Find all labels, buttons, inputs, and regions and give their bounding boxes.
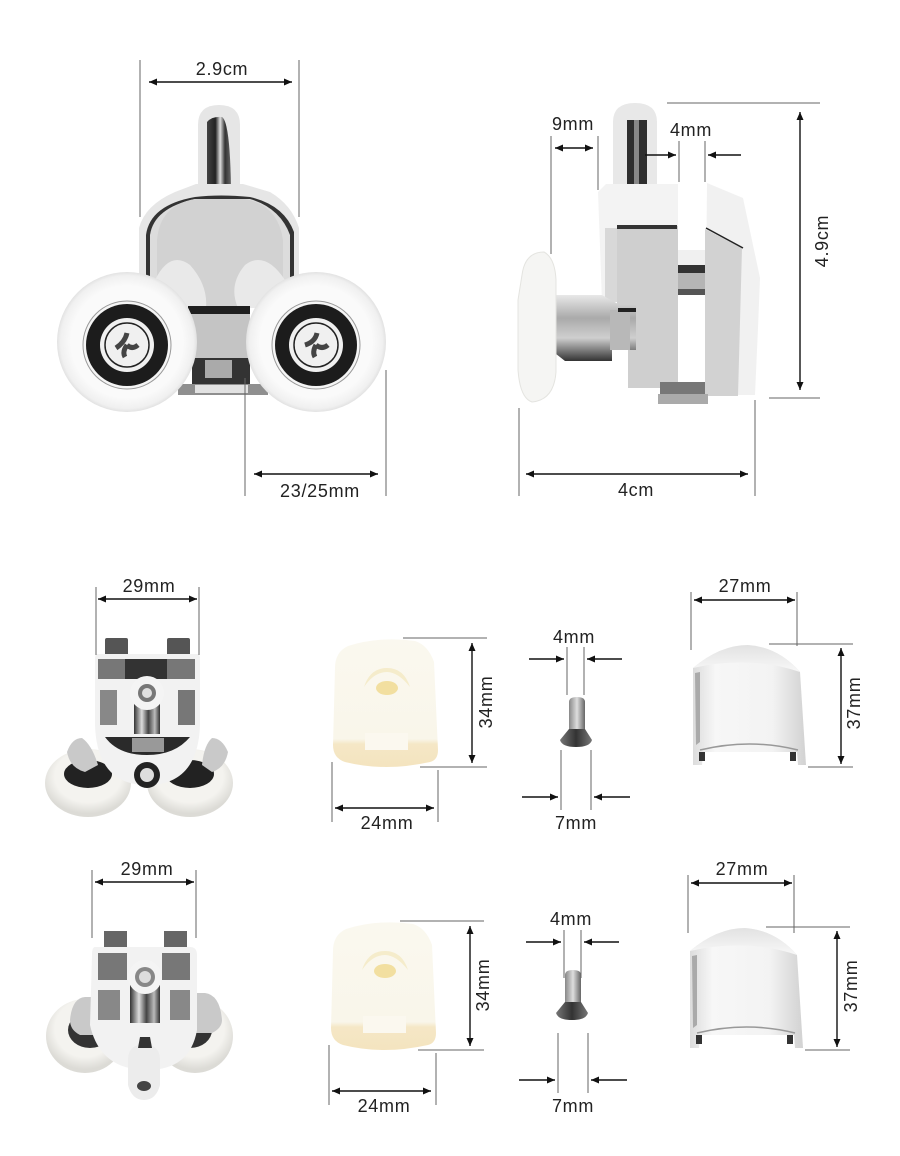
dim 29mm row 2: 29mm (121, 859, 173, 879)
pin (198, 105, 240, 188)
dimension: 2.9cm: 2.9cm (196, 59, 248, 79)
dim 24mm row 2 (329, 1045, 436, 1116)
dim 27mm row 1 (691, 576, 797, 650)
dim 7mm screw row 1 (522, 750, 630, 833)
dim 34mm row 2 (400, 921, 493, 1050)
body left part (598, 184, 678, 388)
dim 24mm row 2: 24mm (358, 1096, 410, 1116)
center rod (658, 250, 708, 404)
dim 4mm screw row 1 (529, 627, 622, 695)
axle (551, 295, 636, 361)
dim 27mm row 1: 27mm (719, 576, 771, 596)
dim 4mm screw row 1: 4mm (553, 627, 595, 647)
dimension: 9mm (551, 114, 598, 254)
dimension: 23/25mm (245, 370, 386, 501)
row 1 pad (333, 639, 438, 767)
dim 34mm row 1 (403, 638, 496, 767)
dim 29mm row 1: 29mm (123, 576, 175, 596)
dim 29mm row 2 (92, 859, 196, 938)
dimension: 4cm (519, 400, 755, 500)
dimension: 9mm: 9mm (552, 114, 594, 134)
dimension: 4.9cm (667, 103, 832, 398)
dim 37mm row 2 (766, 927, 861, 1050)
dimension: 23/25mm: 23/25mm (280, 481, 360, 501)
product: side view roller (518, 103, 760, 404)
dim 29mm row 1 (96, 576, 199, 655)
dimension: 4cm: 4cm (618, 480, 654, 500)
row 1 screw (560, 697, 592, 747)
dim 37mm row 2: 37mm (841, 960, 861, 1012)
dim 7mm screw row 2: 7mm (552, 1096, 594, 1116)
row 2 assembly (46, 931, 233, 1100)
dim 27mm row 2: 27mm (716, 859, 768, 879)
dim 7mm screw row 1: 7mm (555, 813, 597, 833)
left wheel (57, 272, 197, 412)
dimension: 4mm: 4mm (670, 120, 712, 140)
dim 24mm row 1: 24mm (361, 813, 413, 833)
dim 34mm row 1: 34mm (476, 676, 496, 728)
dim 4mm screw row 2: 4mm (550, 909, 592, 929)
dimension: 2.9cm (140, 59, 299, 217)
dimension: 4mm (645, 120, 741, 182)
row 1 assembly (45, 638, 233, 817)
pin (613, 103, 657, 195)
row 2 cap (690, 928, 803, 1048)
dim 24mm row 1 (332, 762, 438, 833)
dimension: 4.9cm: 4.9cm (812, 215, 832, 267)
row 2 pad (331, 922, 436, 1050)
row 1 cap (693, 645, 806, 765)
dim 37mm row 1: 37mm (844, 677, 864, 729)
dim 34mm row 2: 34mm (473, 959, 493, 1011)
right wheel (246, 272, 386, 412)
dim 7mm screw row 2 (519, 1033, 627, 1116)
body (139, 184, 299, 395)
row 2 screw (556, 970, 588, 1020)
dim 4mm screw row 2 (526, 909, 619, 978)
body right part (705, 183, 760, 396)
dim 27mm row 2 (688, 859, 794, 933)
wheel (518, 252, 556, 402)
dim 37mm row 1 (769, 644, 864, 767)
product: front view double roller (57, 105, 386, 412)
